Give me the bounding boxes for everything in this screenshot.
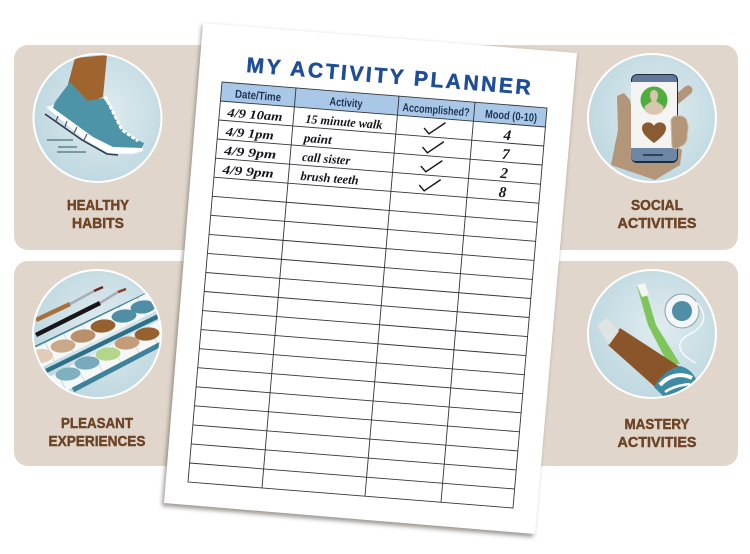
label: mastery activities: ACTIVITIES <box>618 435 697 451</box>
paper shadow <box>162 25 576 537</box>
table header: Date/Time <box>235 89 282 104</box>
table header: Activity <box>329 96 363 111</box>
label: social activities: SOCIAL <box>631 198 683 214</box>
date and time entries <box>221 106 283 181</box>
label: mastery activities <box>618 417 697 451</box>
activity entries: 15 minute walk <box>305 112 384 132</box>
date and time entries: 4/9 9pm <box>222 144 277 162</box>
label: social activities <box>618 198 697 232</box>
date and time entries: 4/9 1pm <box>224 125 275 142</box>
title: MY ACTIVITY PLANNER <box>246 54 532 100</box>
table header: Accomplished? <box>402 102 470 119</box>
date and time entries: 4/9 9pm <box>221 163 274 181</box>
label: healthy habits: HEALTHY <box>67 198 129 214</box>
activity entries <box>299 112 384 189</box>
label: mastery activities: MASTERY <box>624 417 690 433</box>
table grid <box>188 82 547 508</box>
date and time entries: 4/9 10am <box>226 106 283 124</box>
accomplished check marks <box>419 121 445 192</box>
panel: healthy habits <box>14 45 202 250</box>
label: pleasant experiences: PLEASANT <box>61 416 133 432</box>
panel: social activities <box>479 45 738 250</box>
table header: Mood (0-10) <box>485 109 538 125</box>
panel: mastery activities <box>541 261 738 466</box>
mood scores: 2 <box>499 166 509 182</box>
table header <box>220 82 547 127</box>
activity entries: call sister <box>302 150 351 168</box>
mood scores: 4 <box>502 128 512 144</box>
activity planner sheet <box>164 23 577 534</box>
planner table with title <box>188 52 550 508</box>
label: pleasant experiences: EXPERIENCES <box>48 434 146 450</box>
label: pleasant experiences <box>48 416 146 450</box>
mood scores: 8 <box>498 185 507 201</box>
icon: toothpaste, toothbrush and floss <box>588 270 716 398</box>
icon: running shoe <box>34 54 162 182</box>
activity entries: paint <box>302 131 333 147</box>
label: healthy habits <box>67 198 129 232</box>
label: social activities: ACTIVITIES <box>618 216 697 232</box>
panel: pleasant experiences <box>14 261 184 466</box>
icon: watercolor palette <box>28 270 172 398</box>
mood scores: 7 <box>501 147 512 163</box>
label: healthy habits: HABITS <box>72 216 124 232</box>
icon: hand holding phone <box>588 54 716 182</box>
mood scores <box>497 128 513 201</box>
activity entries: brush teeth <box>300 169 359 188</box>
